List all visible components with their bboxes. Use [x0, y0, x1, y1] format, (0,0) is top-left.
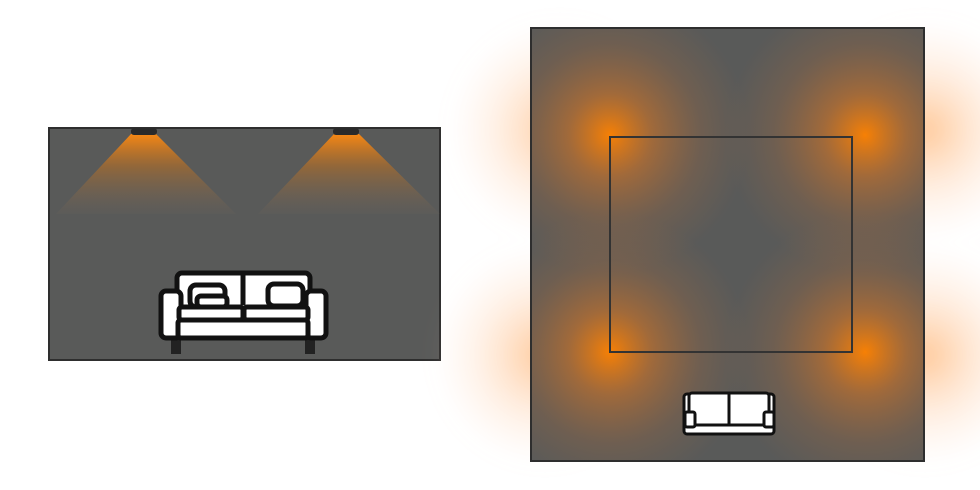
- light cone left: [56, 134, 236, 214]
- icon: ceiling light right: [333, 128, 359, 135]
- panel: side view: [49, 128, 440, 360]
- inner ceiling outline: [610, 137, 852, 352]
- light cone right: [258, 134, 440, 214]
- icon: sofa front view: [161, 273, 326, 354]
- icon: ceiling light left: [131, 128, 157, 135]
- panel: top view: [453, 27, 980, 462]
- icon: sofa top view: [684, 393, 774, 434]
